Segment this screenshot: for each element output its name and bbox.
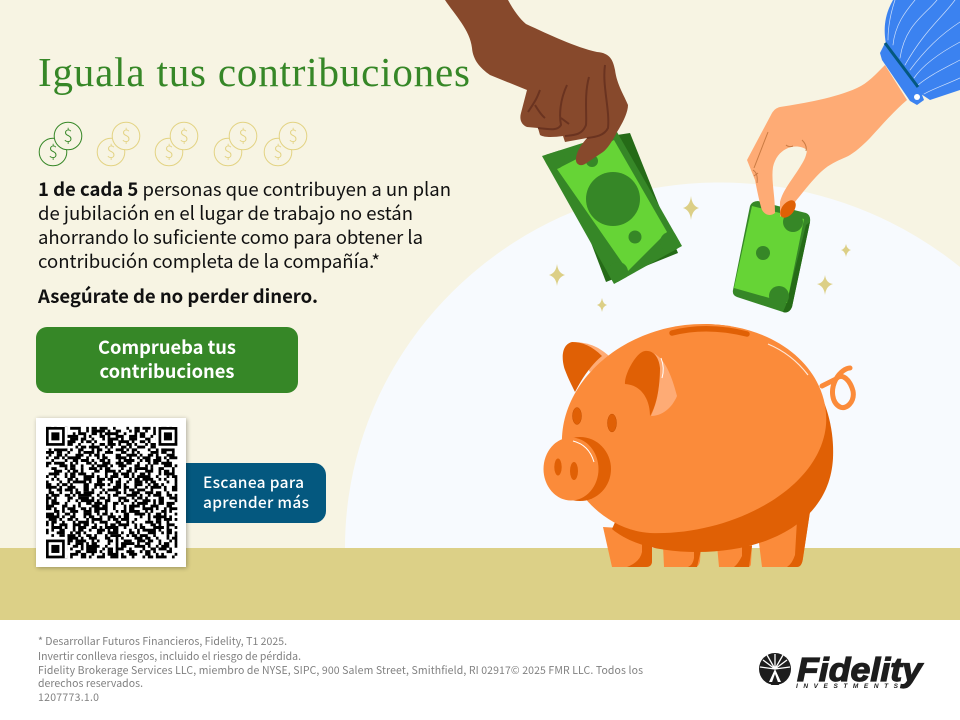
- Fidelity logo: [759, 651, 924, 690]
- icon: green coin pair: $: [48, 138, 58, 163]
- icon: yellow coin pair 5: $: [288, 122, 298, 147]
- button: Comprueba tus contribuciones: [36, 327, 298, 393]
- icon: yellow coin pair 3: [155, 122, 198, 166]
- right hand: shirt sleeve: [880, 0, 960, 105]
- small dollar bill: [733, 201, 810, 312]
- body paragraph: de jubilación en el lugar de trabajo no están: [38, 200, 413, 226]
- sparkles: [549, 196, 851, 312]
- icon: yellow coin pair 2: $: [121, 122, 131, 147]
- footer disclosure text: [38, 634, 643, 705]
- icon: yellow coin pair 3: $: [164, 138, 174, 163]
- icon: yellow coin pair 4: [214, 122, 257, 166]
- front ear: [625, 351, 677, 416]
- tail: [822, 368, 853, 408]
- pig eyes: [572, 408, 616, 432]
- callout: scan to learn more: aprender más: [203, 491, 309, 513]
- pig snout: [544, 437, 611, 501]
- brown hand holding bill: [445, 0, 628, 165]
- icon: green coin pair: $: [63, 122, 73, 147]
- icon: yellow coin pair 3: $: [179, 122, 189, 147]
- ground band: [0, 548, 960, 620]
- icon: yellow coin pair 2: [97, 122, 140, 166]
- footer disclosure text: Invertir conlleva riesgos, incluido el riesgo de pérdida.: [38, 649, 301, 664]
- footer panel: [0, 620, 960, 720]
- piggy bank: [544, 324, 853, 567]
- QR code card: [36, 418, 187, 568]
- icon: yellow coin pair 5: [264, 122, 307, 166]
- icon: green coin pair: [39, 122, 82, 166]
- Fidelity logo: INVESTMENTS: [796, 683, 899, 690]
- pig legs: [603, 513, 810, 567]
- title: Iguala tus contribuciones: [38, 49, 470, 95]
- icon: yellow coin pair 5: $: [273, 138, 283, 163]
- right hand pinching bill: [747, 65, 907, 221]
- body paragraph: contribución completa de la compañía.*: [38, 248, 380, 274]
- callout: scan to learn more: Escanea para: [203, 471, 304, 493]
- back ear: [563, 342, 609, 392]
- footer disclosure text: * Desarrollar Futuros Financieros, Fidelity, T1 2025.: [38, 634, 287, 649]
- icon: yellow coin pair 2: $: [106, 138, 116, 163]
- body paragraph: [38, 176, 451, 274]
- footer disclosure text: derechos reservados.: [38, 676, 143, 691]
- emphasis line: Asegúrate de no perder dinero.: [37, 283, 318, 309]
- footer disclosure text: 1207773.1.0: [38, 690, 99, 705]
- body paragraph: 1 de cada 5 personas que contribuyen a un plan: [38, 176, 451, 202]
- callout: scan to learn more: [186, 463, 326, 523]
- icon row: five coin pairs, one highlighted: [39, 122, 307, 166]
- button: Comprueba tus contribuciones: contribuciones: [100, 358, 234, 384]
- pale blue semicircle: [345, 182, 960, 548]
- button: Comprueba tus contribuciones: Comprueba tus: [98, 334, 236, 360]
- pig body: [562, 324, 833, 552]
- Fidelity logo: Fidelity: [797, 651, 924, 688]
- icon: yellow coin pair 4: $: [238, 122, 248, 147]
- body paragraph: ahorrando lo suficiente como para obtener la: [38, 224, 423, 250]
- large dollar bill: [542, 125, 682, 284]
- icon: yellow coin pair 4: $: [223, 138, 233, 163]
- footer disclosure text: Fidelity Brokerage Services LLC, miembro de NYSE, SIPC, 900 Salem Street, Smithfield, RI 02917© 2025 FMR LLC. Todos los: [38, 663, 643, 678]
